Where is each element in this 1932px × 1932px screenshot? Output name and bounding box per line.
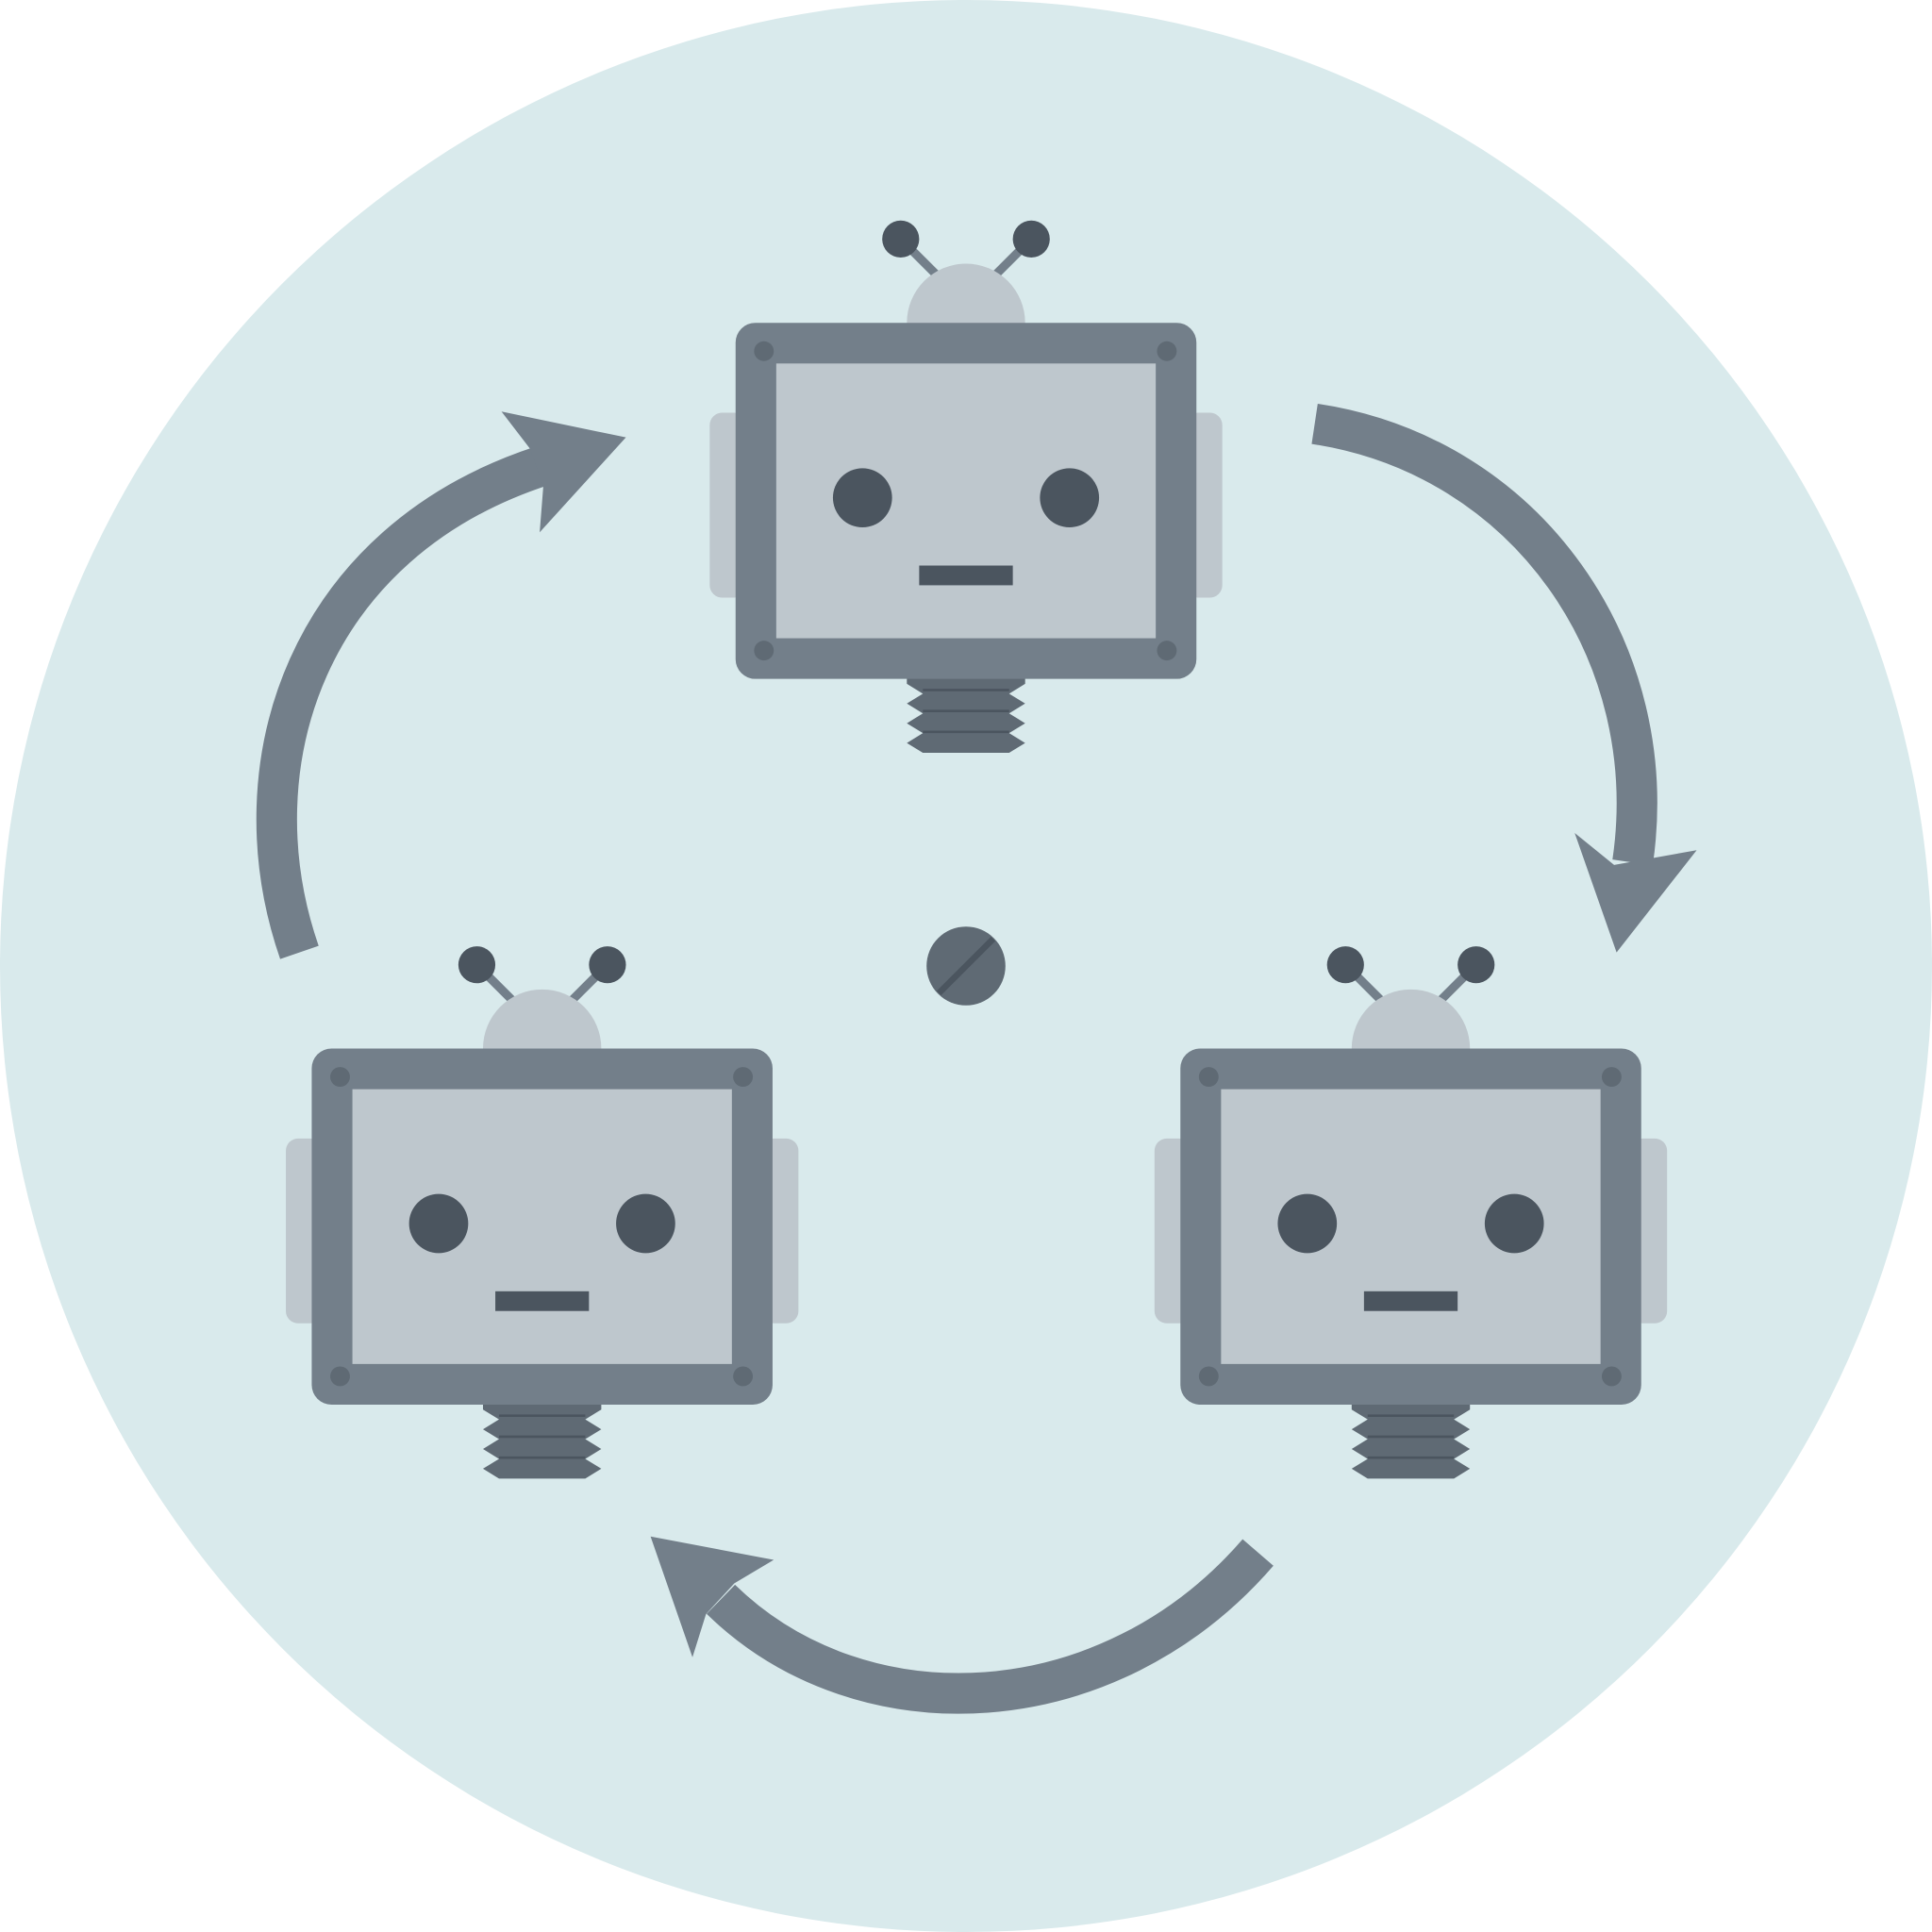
robot: bottom right (1155, 946, 1667, 1478)
center bolt (926, 926, 1006, 1006)
arrow: top left (276, 411, 626, 953)
arrow: bottom (651, 1537, 1258, 1693)
arrow: top right (1315, 424, 1697, 953)
robot: top (709, 221, 1223, 753)
robot: bottom left (286, 946, 798, 1478)
